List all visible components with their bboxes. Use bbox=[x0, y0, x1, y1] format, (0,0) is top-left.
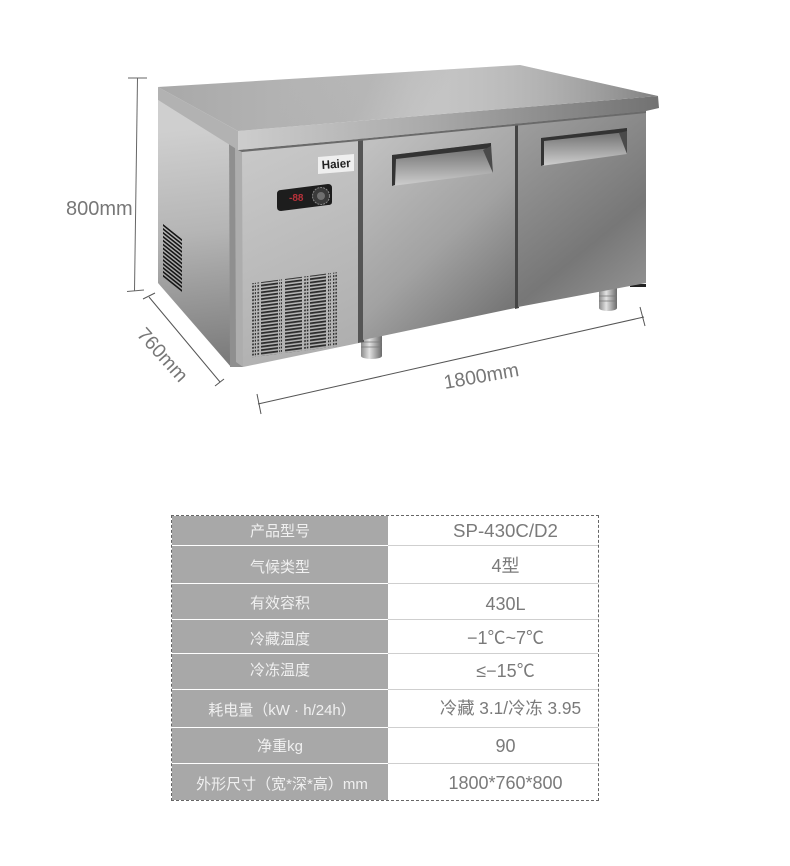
row: climate type: 气候类型 bbox=[250, 559, 310, 576]
height label: 800mm bbox=[66, 198, 133, 220]
door 1 bbox=[363, 122, 515, 340]
row: climate type bbox=[172, 546, 598, 584]
row: refrigeration temperature: −1℃~7℃ bbox=[467, 628, 544, 648]
row: freezing temperature: 冷冻温度 bbox=[250, 662, 310, 679]
row: effective volume bbox=[172, 584, 598, 620]
Haier logo plate: Haier bbox=[321, 156, 351, 172]
row: power consumption: 冷藏 3.1/冷冻 3.95 bbox=[440, 698, 581, 718]
corner post bbox=[229, 143, 243, 367]
row: model: SP-430C/D2 bbox=[453, 520, 558, 540]
worktop front edge bbox=[238, 96, 659, 150]
height dimension line bbox=[127, 78, 147, 292]
product illustration with dimensions bbox=[66, 65, 659, 414]
width dimension line bbox=[257, 307, 645, 414]
row: net weight: 净重kg bbox=[257, 738, 303, 755]
row: model: 产品型号 bbox=[250, 523, 310, 540]
temperature controller: -88 bbox=[289, 193, 304, 204]
feet bbox=[361, 284, 646, 359]
side vent bbox=[163, 223, 182, 293]
Haier logo plate bbox=[318, 154, 354, 174]
row: refrigeration temperature: 冷藏温度 bbox=[250, 631, 310, 648]
side panel bbox=[158, 100, 231, 367]
depth dimension line bbox=[143, 293, 224, 386]
width label: 1800mm bbox=[442, 359, 521, 394]
row: effective volume: 430L bbox=[485, 594, 526, 614]
row: dimensions: 外形尺寸（宽*深*高）mm bbox=[196, 776, 368, 792]
door 2 bbox=[518, 108, 646, 307]
worktop surface bbox=[158, 65, 658, 131]
row: dimensions bbox=[172, 764, 563, 800]
temperature controller bbox=[277, 184, 332, 211]
row: dimensions: 1800*760*800 bbox=[448, 772, 563, 792]
gap between front panel and door bbox=[358, 136, 364, 343]
refrigerator body bbox=[158, 65, 659, 367]
handle 2 bbox=[541, 128, 627, 166]
worktop left edge bbox=[158, 87, 238, 150]
row: power consumption: 耗电量（kW · h/24h） bbox=[208, 702, 356, 719]
row: net weight: 90 bbox=[495, 736, 516, 756]
row: effective volume: 有效容积 bbox=[250, 595, 310, 612]
row: climate type: 4型 bbox=[491, 556, 520, 576]
row: power consumption bbox=[172, 690, 598, 728]
gap between doors bbox=[515, 122, 519, 309]
specification table bbox=[171, 515, 599, 801]
front control panel bbox=[242, 136, 359, 367]
shadow line under worktop bbox=[238, 111, 646, 152]
depth label: 760mm bbox=[132, 324, 192, 387]
handle 1 bbox=[392, 143, 493, 186]
row: freezing temperature bbox=[172, 654, 598, 690]
row: net weight bbox=[172, 728, 598, 764]
front vent bbox=[252, 272, 337, 357]
row: freezing temperature: ≤−15℃ bbox=[476, 660, 535, 680]
row: model bbox=[172, 516, 598, 546]
row: refrigeration temperature bbox=[172, 620, 598, 654]
